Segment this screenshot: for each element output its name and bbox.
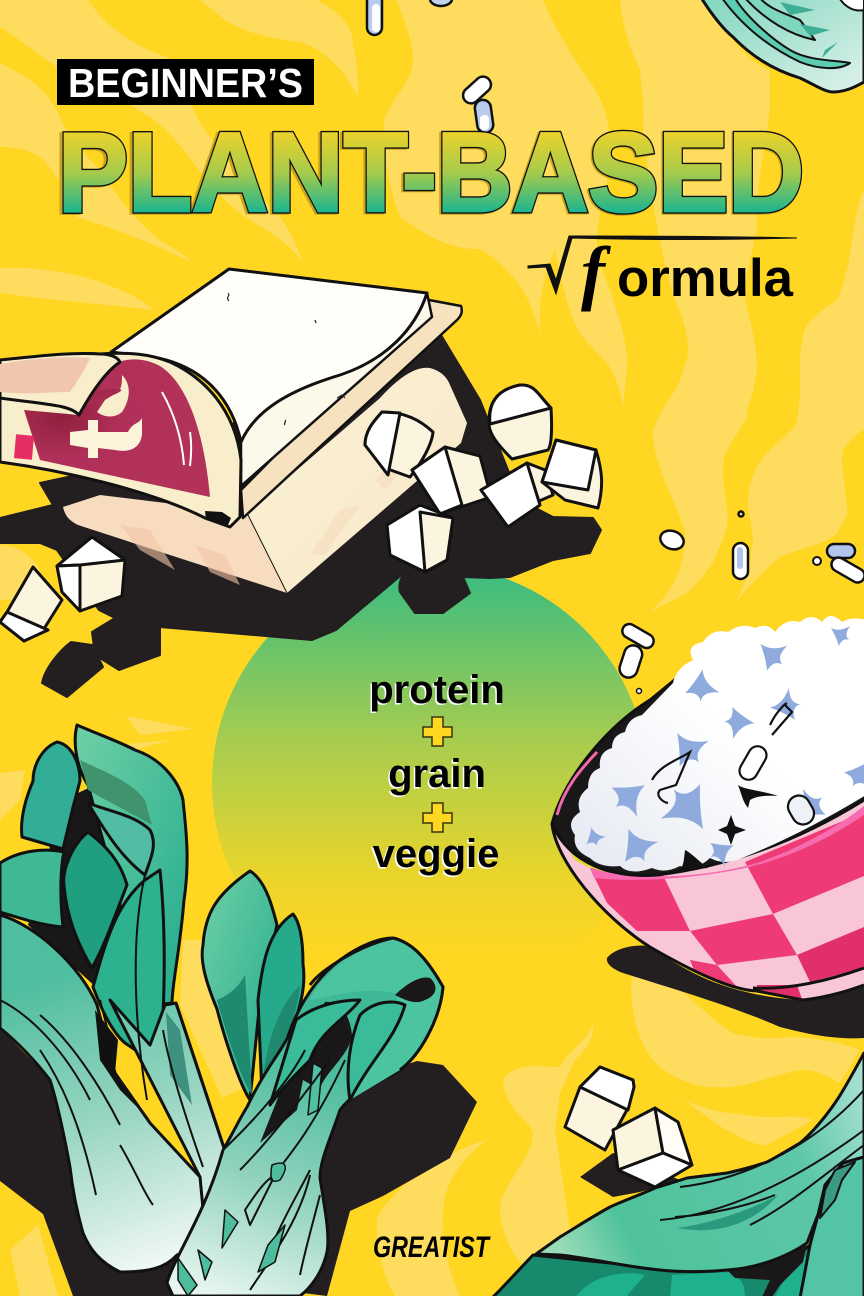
big leaf upper colour xyxy=(310,938,443,1100)
tray body right face xyxy=(247,368,467,593)
tall back leaf xyxy=(75,725,187,1010)
dark gaps in leaf xyxy=(260,977,435,1143)
back stem xyxy=(110,1000,232,1230)
pink square xyxy=(14,434,34,460)
dark leaf shadow xyxy=(80,760,152,825)
formula equation xyxy=(368,668,505,878)
wrapper highlights xyxy=(162,392,191,466)
wrapper flap xyxy=(0,353,120,415)
wrapper logo letter t xyxy=(70,418,142,458)
bok choy right xyxy=(167,871,443,1296)
tofu package xyxy=(0,269,467,593)
tray rim xyxy=(241,300,462,518)
tofu side face xyxy=(241,293,432,486)
greatist logo: GREATIST xyxy=(373,1231,491,1264)
center tall leaf xyxy=(93,870,164,1060)
wrapper red panel xyxy=(24,359,210,497)
grain: grain xyxy=(387,754,484,798)
stem teal ribs xyxy=(178,1163,285,1296)
wrapper sleeve xyxy=(0,353,241,527)
teal bright leaves xyxy=(575,1190,864,1296)
tofu cubes xyxy=(0,385,602,641)
cube lower xyxy=(387,505,453,572)
stem dark strip xyxy=(166,1012,192,1105)
back left leaf xyxy=(22,742,80,849)
main upper leaf xyxy=(536,1053,864,1272)
bowl shadow xyxy=(607,946,864,1038)
label: BEGINNER'S: BEGINNER’S xyxy=(68,60,303,106)
formula wordmark xyxy=(528,232,797,312)
bok choy bottom right xyxy=(490,1053,864,1296)
bowl body with checks xyxy=(556,802,864,998)
cube on tray xyxy=(365,412,433,477)
rice grain top 1 xyxy=(367,0,382,35)
stem veins xyxy=(0,875,203,1205)
back stem right outline xyxy=(176,1003,231,1232)
cube top right xyxy=(489,385,552,459)
veggie: veggie xyxy=(371,834,498,878)
blue shadows in rice xyxy=(581,626,864,871)
rice grains above bowl xyxy=(617,621,656,694)
cube left small xyxy=(0,567,62,641)
rice grain outlines xyxy=(652,704,818,828)
formula wordmark: f xyxy=(581,232,611,312)
title: PLANT-BASED: PLANT-BASED xyxy=(58,110,804,235)
plus two xyxy=(423,803,452,832)
rice grain pair upper xyxy=(460,73,494,134)
center dark leaf xyxy=(64,832,127,968)
tray body left face xyxy=(63,495,287,593)
leaf one xyxy=(202,871,277,1100)
tofu shadow xyxy=(0,330,601,670)
stem inner teal shape xyxy=(308,1063,322,1115)
black wedge between leaves xyxy=(95,1010,150,1120)
cube left big xyxy=(57,537,125,611)
inner leaf folds xyxy=(270,1000,405,1105)
rice grain top 2 xyxy=(430,0,452,6)
grain: grain xyxy=(388,752,486,796)
tofu specks xyxy=(228,293,345,425)
big leaf outline xyxy=(310,938,443,1070)
cube far right xyxy=(542,440,602,508)
leaf far left xyxy=(0,850,64,927)
leaf one dark xyxy=(217,975,252,1095)
leaf two xyxy=(258,914,304,1095)
cube middle xyxy=(412,447,491,514)
protein: protein xyxy=(369,668,505,712)
right leaf fold xyxy=(800,1157,864,1296)
plus one xyxy=(423,717,452,746)
shadow blob lower xyxy=(42,642,103,697)
wrapper red lens xyxy=(95,389,122,398)
wrapper black tab xyxy=(205,511,231,525)
rice grains right cluster xyxy=(658,512,864,585)
top right leaf xyxy=(700,0,864,92)
green gradient circle xyxy=(212,565,648,1001)
rice mound xyxy=(571,616,864,872)
bottom tofu cubes xyxy=(565,1067,692,1187)
fold dark xyxy=(820,1162,855,1218)
protein: protein xyxy=(368,670,503,714)
black strip under leaf xyxy=(727,1243,807,1296)
bottom cube left xyxy=(565,1067,634,1150)
rice bowl xyxy=(540,616,864,1010)
title: PLANT-BASED: PLANT-BASED xyxy=(55,111,803,236)
bowl interior xyxy=(552,622,864,876)
back black fill xyxy=(28,785,130,1000)
big leaf and stem xyxy=(167,938,443,1296)
wrapper flap pink inner xyxy=(0,357,90,393)
left shadow under bok choy xyxy=(0,1028,477,1296)
cube right middle xyxy=(481,463,553,527)
tofu top face xyxy=(111,269,427,442)
bok choy left xyxy=(0,725,232,1272)
wrapper logo letter curve xyxy=(97,375,129,416)
bottom tofu shadow xyxy=(580,1153,680,1197)
left big front leaf and stem xyxy=(0,915,205,1272)
title: PLANT-BASED: PLANT-BASED xyxy=(58,110,804,235)
upper front leaf xyxy=(88,803,153,875)
black gaps in rice xyxy=(680,785,778,870)
formula wordmark: ormula xyxy=(617,249,794,308)
leaf two dark xyxy=(262,985,300,1090)
stem lines xyxy=(223,1050,345,1290)
vein lines xyxy=(660,1090,864,1225)
veggie: veggie xyxy=(373,832,499,876)
rice grains falling xyxy=(367,0,864,694)
bowl outline xyxy=(552,700,864,1000)
lower dark leaves xyxy=(490,1200,864,1296)
bottom cube right xyxy=(613,1108,692,1187)
